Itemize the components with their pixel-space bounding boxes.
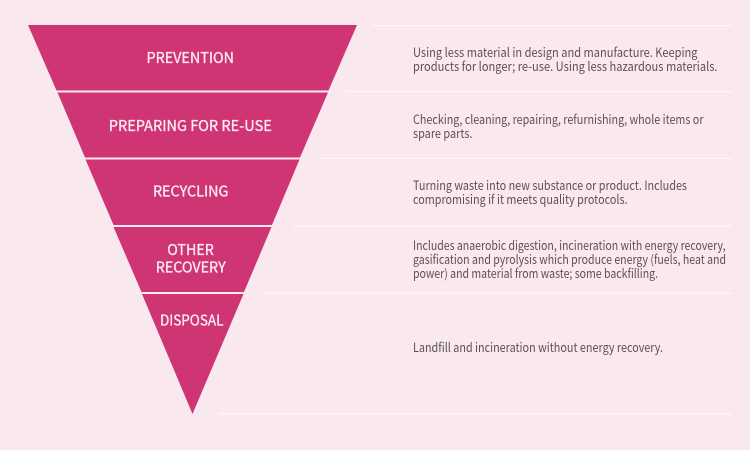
separator lines [219,26,732,414]
description: prevention: Using less material in design and manufacture. Keeping [413,42,698,61]
description: preparing for re-use: spare parts. [413,123,472,142]
pyramid tier: prevention: PREVENTION [147,47,234,68]
description: other recovery: power) and material from waste; some backfilling. [413,263,658,282]
description: recycling: compromising if it meets quality protocols. [413,189,628,208]
pyramid tier: preparing for re-use [58,92,328,158]
description: preparing for re-use [413,109,704,142]
inverted pyramid [28,25,357,414]
description: recycling: Turning waste into new substance or product. Includes [413,175,687,194]
pyramid tier: recycling [86,160,300,225]
description: prevention: products for longer; re-use. Using less hazardous materials. [413,56,718,75]
description: other recovery [413,235,726,282]
pyramid tier: disposal: DISPOSAL [160,310,223,330]
pyramid tier: other recovery: OTHER [167,239,214,260]
description: recycling [413,175,687,208]
pyramid tier: disposal [142,294,244,414]
pyramid tier: other recovery [114,227,272,292]
pyramid tier: preparing for re-use: PREPARING FOR RE-USE [109,115,272,136]
pyramid tier: other recovery: RECOVERY [156,256,226,278]
description: prevention [413,42,718,75]
description: preparing for re-use: Checking, cleaning, repairing, refurnishing, whole items or [413,109,704,128]
description: disposal: Landfill and incineration without energy recovery. [413,337,663,356]
pyramid tier: recycling: RECYCLING [153,180,228,202]
pyramid tier: prevention [28,25,357,90]
